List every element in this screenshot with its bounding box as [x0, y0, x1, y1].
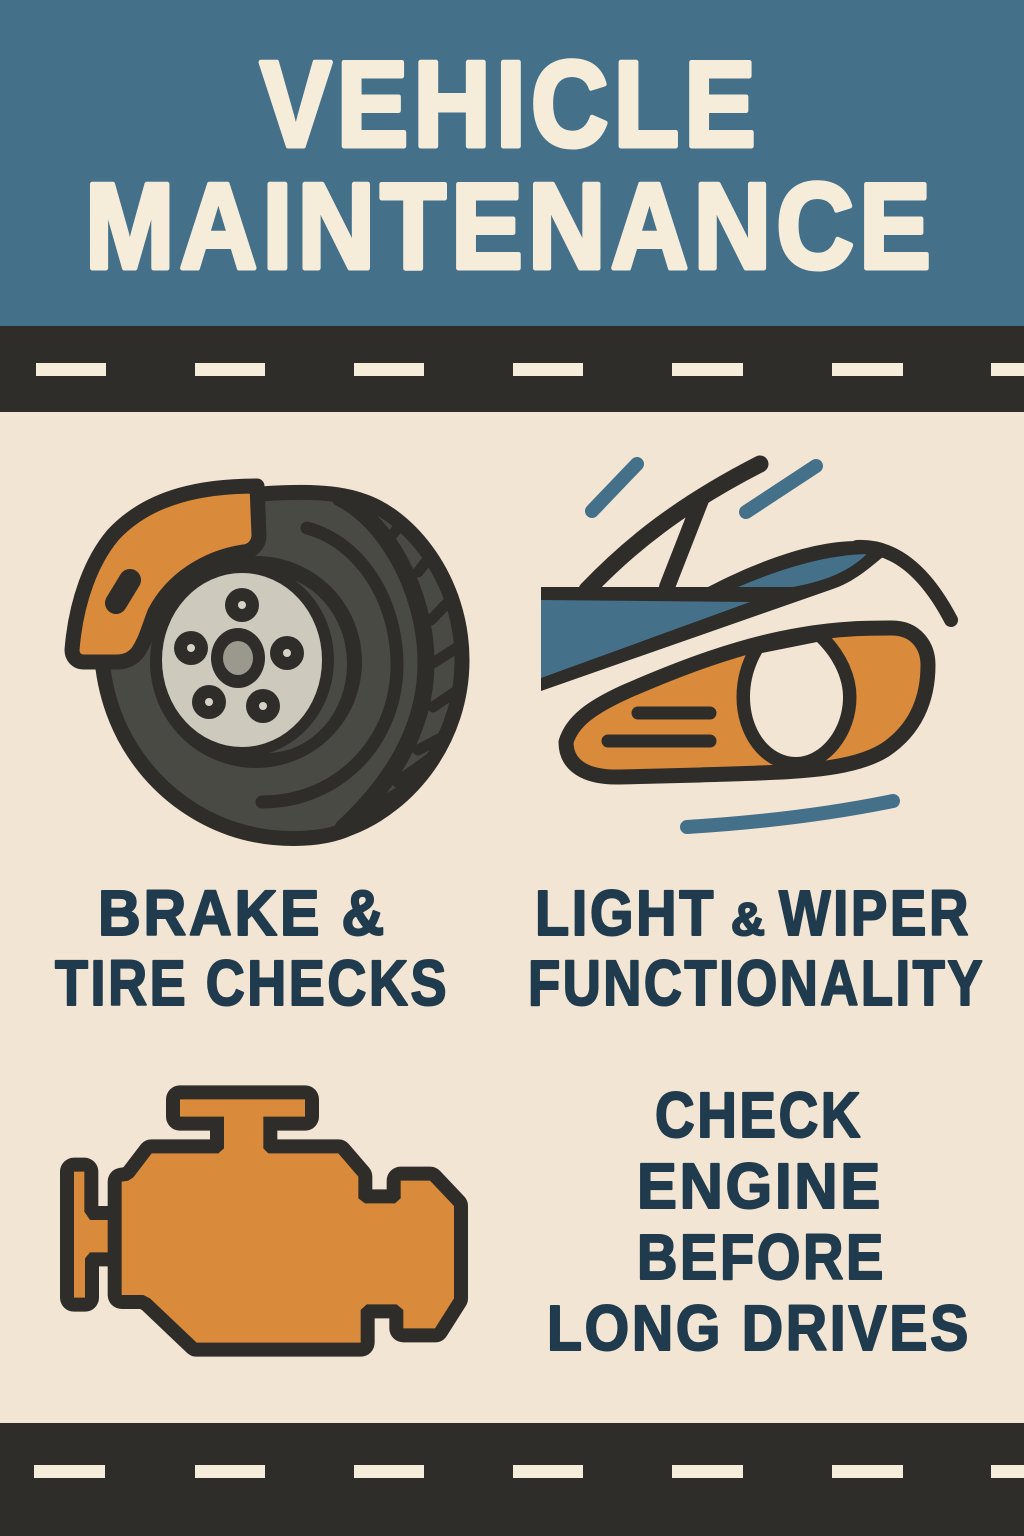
icon: check engine	[74, 1099, 454, 1343]
header band	[0, 0, 1024, 327]
title: VEHICLE	[260, 36, 761, 172]
label: light and wiper functionality: WIPER	[779, 877, 971, 949]
label: brake and tire checks	[55, 877, 449, 1019]
bottom road band	[0, 1423, 1024, 1536]
car hood	[541, 541, 951, 691]
tire	[102, 492, 462, 838]
label: check engine before long drives: CHECK	[655, 1079, 863, 1151]
label: check engine before long drives	[547, 1079, 971, 1364]
label: check engine before long drives: BEFORE	[637, 1221, 886, 1293]
label: light and wiper functionality	[528, 877, 985, 1019]
label: brake and tire checks: TIRE CHECKS	[55, 947, 449, 1019]
label: light and wiper functionality: LIGHT	[535, 877, 716, 949]
wheel hub	[150, 556, 362, 768]
top road band	[0, 326, 1024, 412]
headlight lens housing	[566, 628, 928, 777]
title	[85, 36, 936, 294]
label: brake and tire checks: BRAKE &	[98, 877, 387, 949]
title: MAINTENANCE	[85, 158, 936, 294]
label: check engine before long drives: ENGINE	[637, 1150, 883, 1222]
motion lines	[592, 464, 893, 827]
icon: brake and tire	[72, 486, 462, 838]
label: light and wiper functionality: &	[731, 893, 768, 945]
label: check engine before long drives: LONG DRIVES	[547, 1292, 971, 1364]
windshield and wiper	[587, 464, 760, 590]
brake caliper	[72, 486, 259, 662]
icon: headlight and wiper	[541, 464, 951, 827]
